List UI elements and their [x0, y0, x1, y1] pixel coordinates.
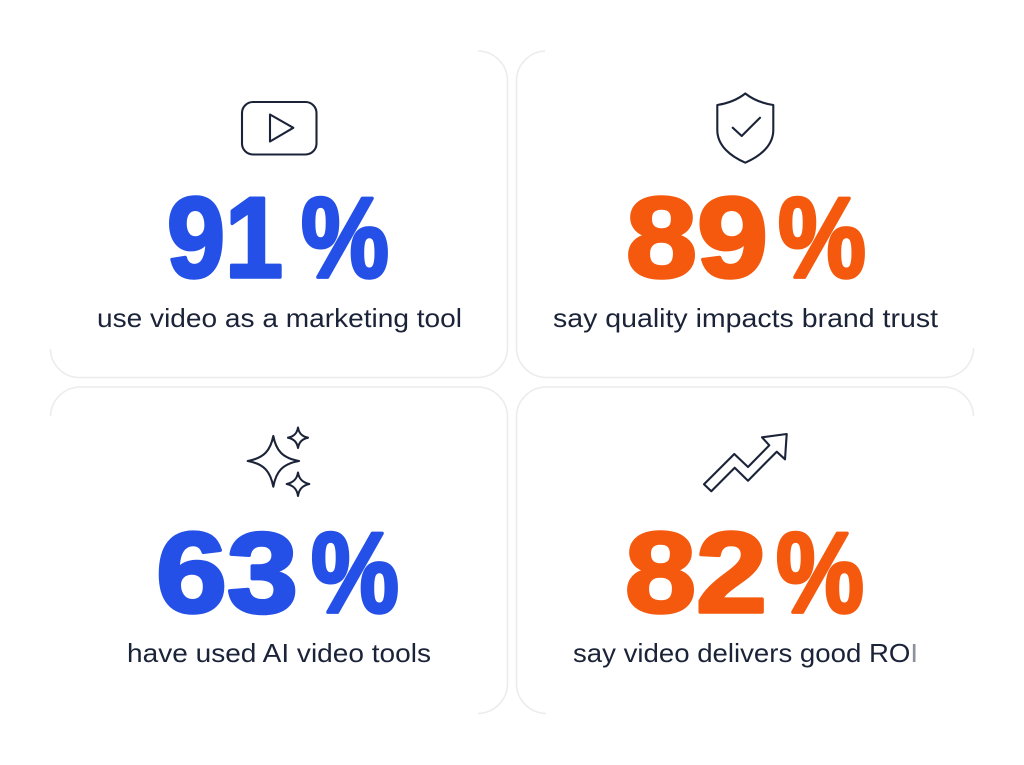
stat: 91%: %: [301, 175, 389, 302]
label: say quality impacts brand trust: say quality impacts brand trust: [553, 303, 939, 333]
icon: sparkles: [248, 428, 309, 496]
stat: 82%: %: [776, 510, 864, 637]
icon: video play: [242, 102, 316, 154]
panel: 91% use video: [50, 51, 508, 378]
stat: 63%: 63: [156, 510, 298, 637]
stat: 89%: 89: [626, 175, 768, 302]
stat: 91%: 91: [167, 175, 283, 302]
icon: shield with check: [717, 94, 773, 163]
label: have used AI video tools: have used AI video tools: [127, 638, 431, 668]
stat: 89%: %: [778, 175, 866, 302]
label: say video delivers good ROI: say video delivers good ROI: [573, 638, 918, 668]
label: use video as a marketing tool: use video as a marketing tool: [97, 303, 462, 333]
panel: 63% AI tools: [50, 387, 508, 714]
panel: 82% ROI: [516, 387, 974, 714]
stat: 82%: 82: [625, 510, 767, 637]
icon: trending arrow: [704, 434, 787, 491]
stat: 63%: %: [311, 510, 399, 637]
panel: 89% quality: [516, 51, 974, 378]
